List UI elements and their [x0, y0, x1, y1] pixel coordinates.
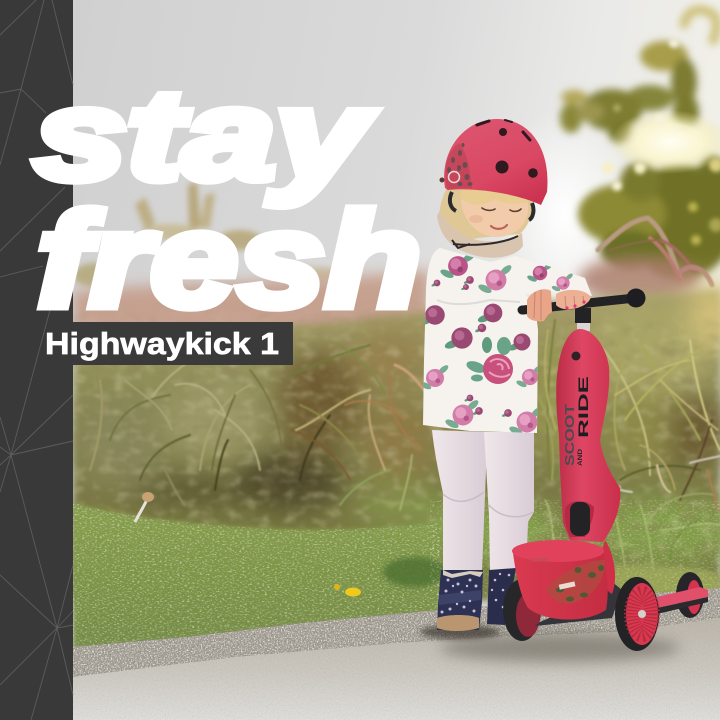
- brand wordmark: [562, 376, 591, 466]
- hedge tonal blobs: [75, 279, 720, 564]
- title: stay fresh: [34, 64, 421, 335]
- bokeh spots: [602, 38, 720, 245]
- face: [460, 188, 530, 237]
- blurred tree top right: [560, 10, 720, 280]
- title word: fresh: fresh: [37, 186, 421, 335]
- small white stick in hedge: [135, 492, 154, 522]
- title word: stay: stay: [34, 64, 376, 207]
- scooter: [503, 288, 708, 651]
- lawn: [73, 500, 447, 650]
- blurred plant behind heading: [73, 182, 355, 287]
- handlebar: [518, 288, 646, 331]
- tree glow highlight: [610, 110, 720, 174]
- floral pattern: [418, 250, 574, 437]
- chassis: [535, 575, 622, 626]
- scooter and child shadow: [440, 634, 680, 662]
- hedge grass blades: [90, 320, 720, 575]
- helmet: [440, 119, 548, 205]
- boots: [437, 568, 516, 631]
- helmet straps: [450, 192, 533, 220]
- brand wordmark: RIDE: [575, 376, 591, 438]
- chin strap: [452, 236, 518, 248]
- gravel path: [73, 588, 720, 677]
- stem: [556, 329, 620, 542]
- curb soil line: [73, 611, 437, 648]
- neck scarf: [437, 210, 523, 258]
- product label: Highwaykick 1: [45, 326, 279, 361]
- basket: [512, 540, 608, 620]
- rear wheel: [676, 572, 704, 618]
- brand wordmark: SCOOT: [562, 404, 577, 466]
- hedge: [73, 290, 720, 600]
- large rose: [465, 337, 513, 384]
- tree canopy: [560, 10, 720, 280]
- dandelions: [334, 584, 361, 596]
- sky: [450, 0, 720, 300]
- smooth road: [73, 618, 720, 720]
- pink grass band: [73, 263, 429, 330]
- hedge texture: [74, 326, 720, 596]
- brand wordmark: AND: [578, 448, 584, 466]
- socket: [565, 501, 594, 537]
- sidebar: [0, 0, 73, 720]
- jacket: [418, 248, 592, 437]
- left front wheel: [503, 579, 541, 641]
- deck: [657, 587, 708, 608]
- pink pampas grass right: [578, 218, 712, 304]
- grass right of child: [430, 500, 720, 600]
- leopard patch: [546, 560, 605, 604]
- darker tuft: [383, 557, 447, 587]
- hands: [527, 289, 591, 321]
- hair: [440, 188, 532, 240]
- child: [418, 119, 592, 631]
- right front wheel: [615, 577, 659, 651]
- leggings: [432, 430, 534, 572]
